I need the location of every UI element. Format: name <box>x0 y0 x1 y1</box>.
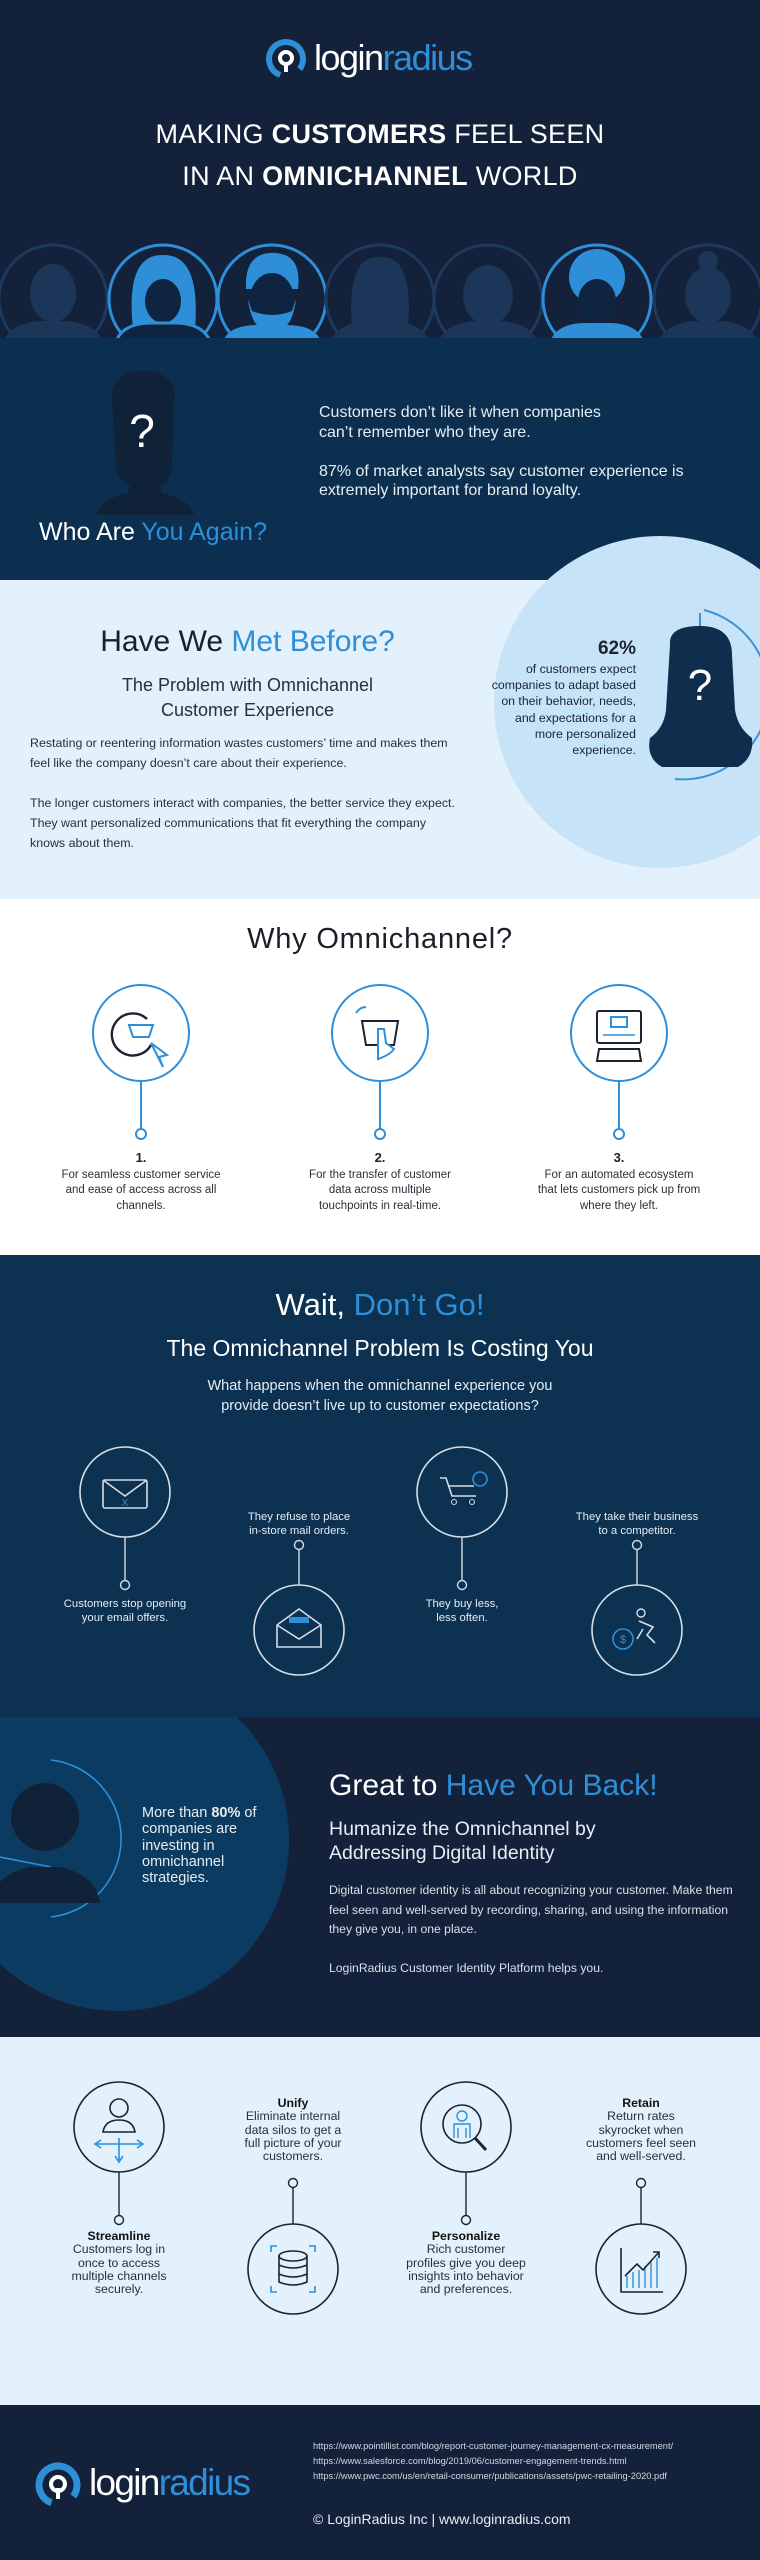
text: 2. <box>375 1150 385 1165</box>
text: 3. <box>614 1150 624 1165</box>
icon: growth chart <box>571 2172 711 2342</box>
heading: who are you again: Who Are You Again? <box>39 518 267 546</box>
heading: Why Omnichannel? <box>247 923 513 955</box>
avatar 4 dim <box>324 244 434 338</box>
sources: https://www.pointillist.com/blog/report-customer-journey-management-cx-measurement/ <box>313 2441 673 2451</box>
copyright: © LoginRadius Inc | www.loginradius.com <box>313 2511 571 2527</box>
paragraph <box>30 736 455 850</box>
section: have we met before <box>0 580 760 899</box>
icon: logo ring <box>34 2460 84 2510</box>
text <box>64 1598 186 1624</box>
icon: user arrows <box>49 2080 189 2230</box>
avatar 5 dim <box>434 244 542 338</box>
subheading: Humanize the Omnichannel by <box>329 1818 596 1840</box>
text: securely. <box>95 2282 143 2296</box>
section: footer <box>0 2405 760 2560</box>
avatar 2 highlighted <box>108 244 218 338</box>
icon: unknown person silhouette <box>96 371 194 515</box>
item: buy less <box>416 1446 508 1624</box>
text: They take their business <box>576 1511 698 1523</box>
sources: https://www.salesforce.com/blog/2019/06/customer-engagement-trends.html <box>313 2456 627 2466</box>
text <box>223 2097 363 2163</box>
icon: logo ring <box>266 39 306 78</box>
section: great to have you back <box>0 1717 760 2037</box>
section: header <box>0 39 760 338</box>
item: streamline <box>49 2080 189 2300</box>
text: less often. <box>436 1612 488 1624</box>
text <box>571 2097 711 2163</box>
question: What happens when the omnichannel experience you <box>207 1378 552 1394</box>
text: profiles give you deep <box>406 2256 526 2270</box>
text: once to access <box>78 2256 160 2270</box>
subheading <box>122 675 373 720</box>
paragraph: Restating or reentering information wastes customers’ time and makes them feel like the company doesn’t care about their experience. <box>30 736 448 770</box>
text block: Customers don’t like it when companies <box>319 404 601 421</box>
text block: 87% of market analysts say customer experience is <box>319 462 684 480</box>
text: Eliminate internal <box>246 2109 340 2123</box>
text: to a competitor. <box>598 1525 676 1537</box>
title: MAKING CUSTOMERS FEEL SEEN <box>156 119 604 149</box>
icon: touch basket <box>331 984 429 1140</box>
section: solutions <box>0 2037 760 2405</box>
stat 62%: 62% <box>598 638 636 659</box>
circle panel <box>494 536 760 868</box>
text: Retain <box>622 2096 660 2110</box>
paragraph: Digital customer identity is all about recognizing your customer. Make them feel seen and well-served by recording, sharing, and using the information they give you, in one place. <box>329 1883 733 1936</box>
text <box>576 1511 698 1537</box>
text: customers. <box>263 2149 323 2163</box>
text block: extremely important for brand loyalty. <box>319 482 581 499</box>
title: IN AN OMNICHANNEL WORLD <box>182 161 578 191</box>
section: why omnichannel <box>0 899 760 1255</box>
text <box>39 2230 199 2296</box>
subheading: The Omnichannel Problem Is Costing You <box>166 1335 594 1361</box>
text: Unify <box>278 2096 308 2110</box>
icon: envelope <box>79 1446 171 1590</box>
icon: money running <box>591 1540 683 1676</box>
icon: kiosk <box>570 984 668 1140</box>
text: multiple channels <box>71 2269 166 2283</box>
icon: cart click <box>92 984 190 1140</box>
question <box>207 1378 552 1414</box>
text: customers feel seen <box>586 2136 696 2150</box>
text: Customers log in <box>73 2242 165 2256</box>
item: competitor <box>576 1511 698 1676</box>
text: For seamless customer service and ease of access across all channels. <box>61 1168 221 1212</box>
text: They buy less, <box>426 1598 498 1610</box>
icon: female silhouette with arc: ? <box>688 661 712 710</box>
stat 62%: of customers expect companies to adapt based on their behavior, needs, and expectations for a more personalized experience. <box>492 662 636 757</box>
text <box>309 1150 451 1212</box>
section: wait don't go <box>0 1255 760 1717</box>
title <box>156 119 604 191</box>
subheading: The Problem with Omnichannel <box>122 675 373 695</box>
text: full picture of your <box>244 2136 342 2150</box>
icon: unknown person silhouette: ? <box>129 405 155 457</box>
text: Personalize <box>432 2229 500 2243</box>
logo text: loginradius <box>89 2462 249 2503</box>
text <box>386 2230 546 2296</box>
item: email <box>64 1446 186 1624</box>
subheading <box>329 1818 596 1864</box>
icon: open envelope <box>253 1540 345 1676</box>
subheading: Addressing Digital Identity <box>329 1842 554 1864</box>
item: personalize <box>396 2080 536 2300</box>
text: and well-served. <box>596 2149 686 2163</box>
item 2 <box>309 984 451 1212</box>
footer logo <box>34 2460 274 2510</box>
avatar 7 dim <box>652 244 760 338</box>
sources <box>313 2439 753 2483</box>
item 3 <box>538 984 700 1212</box>
text: skyrocket when <box>599 2123 683 2137</box>
text <box>538 1150 700 1212</box>
paragraph <box>329 1883 733 1975</box>
item: unify <box>223 2097 363 2357</box>
item: mail orders <box>248 1511 350 1676</box>
text: Return rates <box>607 2109 675 2123</box>
text: They refuse to place <box>248 1511 350 1523</box>
logo text: loginradius. <box>314 37 472 78</box>
text: Streamline <box>88 2229 150 2243</box>
text <box>61 1150 221 1212</box>
text: insights into behavior <box>408 2269 524 2283</box>
text: For the transfer of customer data across multiple touchpoints in real-time. <box>309 1168 451 1212</box>
text: your email offers. <box>82 1612 168 1624</box>
icon: magnifier user <box>396 2080 536 2230</box>
stat 80%: More than 80% of companies are investing in omnichannel strategies. <box>142 1805 256 1886</box>
sources: https://www.pwc.com/us/en/retail-consumer/publications/assets/pwc-retailing-2020.pdf <box>313 2471 667 2481</box>
heading: Have We Met Before? <box>100 625 395 658</box>
text block: can’t remember who they are. <box>319 424 531 440</box>
text: Customers stop opening <box>64 1598 186 1610</box>
avatar 1 dim <box>0 244 108 338</box>
text block <box>319 404 684 499</box>
logo <box>266 37 474 78</box>
icon: database <box>223 2172 363 2342</box>
item: retain <box>571 2097 711 2357</box>
text: data silos to get a <box>245 2123 341 2137</box>
big circle panel <box>0 1669 289 2011</box>
question: provide doesn’t live up to customer expectations? <box>221 1398 539 1414</box>
avatar 3 highlighted <box>218 244 326 338</box>
text: Rich customer <box>427 2242 505 2256</box>
icon: female silhouette with arc <box>649 609 760 780</box>
paragraph: The longer customers interact with companies, the better service they expect. They want personalized communications that fit everything the company knows about them. <box>30 796 455 850</box>
text <box>248 1511 350 1537</box>
subheading: Customer Experience <box>161 700 334 720</box>
icon: envelope: X <box>122 1498 129 1509</box>
text: and preferences. <box>420 2282 512 2296</box>
heading: Wait, Don’t Go! <box>275 1287 485 1322</box>
text: in-store mail orders. <box>249 1525 349 1537</box>
section: who are you again <box>0 338 760 900</box>
item 1 <box>61 984 221 1212</box>
avatars row <box>0 244 760 338</box>
icon: person silhouette with arc <box>0 1759 122 1918</box>
text: For an automated ecosystem that lets customers pick up from where they left. <box>538 1168 700 1212</box>
icon: money running: $ <box>620 1634 626 1646</box>
paragraph: LoginRadius Customer Identity Platform helps you. <box>329 1961 603 1975</box>
icon: cart <box>416 1446 508 1590</box>
avatar 6 highlighted <box>542 244 652 338</box>
text: 1. <box>136 1150 146 1165</box>
text <box>426 1598 498 1624</box>
heading: Great to Have You Back! <box>329 1769 658 1802</box>
light circle decoration <box>494 536 760 868</box>
